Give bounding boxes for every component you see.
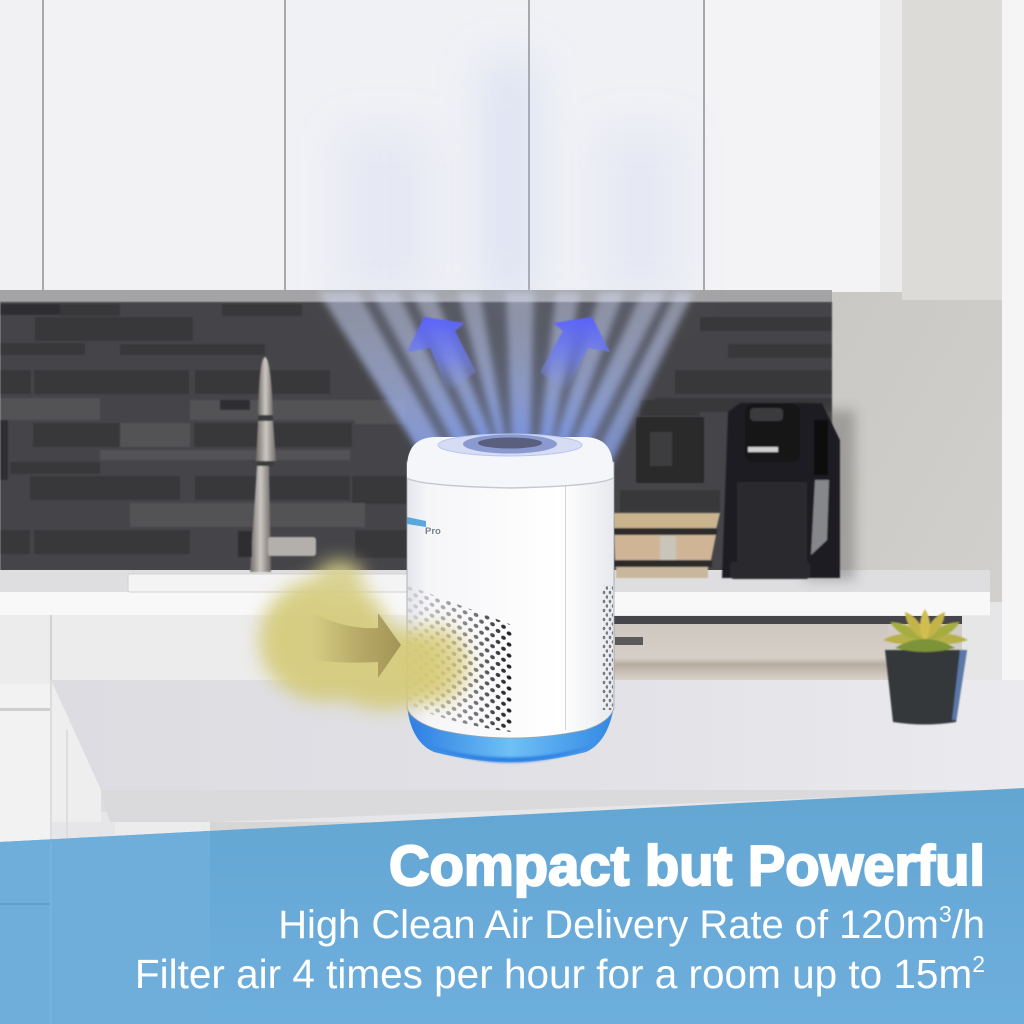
text line 2: Filter air 4 times per hour for a room up to 15m [135,951,972,997]
faucet [238,357,316,572]
top ring [438,434,582,456]
oven [612,616,990,682]
text line 1: 3 [939,901,952,927]
wall outlet [637,418,703,482]
glow above cabinets [340,60,680,300]
arrow: clean air up left [407,317,476,392]
body [407,462,614,738]
tile backsplash [0,302,832,572]
upper cabinets [0,0,902,303]
lid [407,437,613,488]
clean air beams [318,292,694,472]
text line 1: High Clean Air Delivery Rate of 120m [278,903,939,947]
heading: Compact but Powerful [389,834,985,898]
perforations [408,586,512,732]
foliage [883,609,968,652]
coffee machine [722,403,855,580]
arrow: dirty air in [312,612,401,678]
text line 1: /h [952,903,985,947]
purifier [407,434,614,762]
banner [0,788,1024,1024]
smoke cloud [259,560,469,710]
bowl [613,513,720,578]
logo: Pro [425,526,441,537]
island counter [0,680,1024,852]
plant [883,609,968,724]
logo [407,517,441,537]
counter and lower cabinets [0,570,990,685]
arrow: clean air up right [540,317,610,392]
base glow [407,706,614,762]
text line 2: 2 [972,951,985,977]
